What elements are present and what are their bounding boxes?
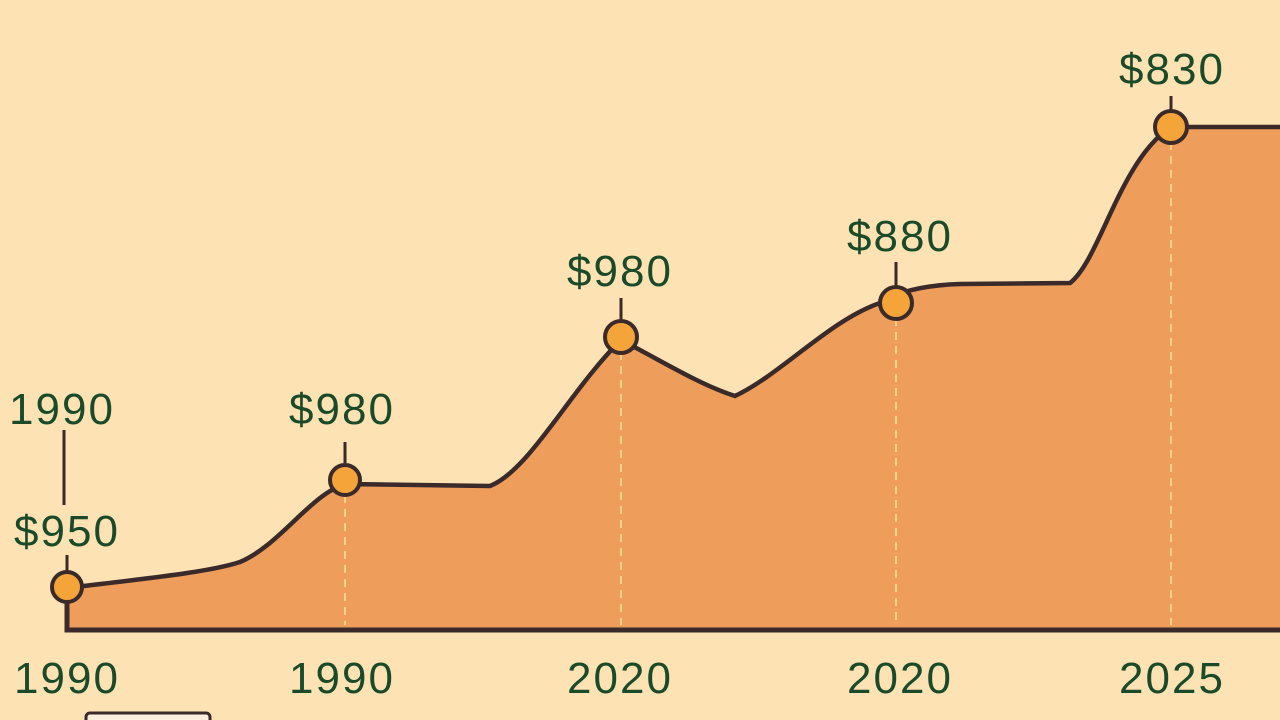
value labels: 1990 xyxy=(9,385,115,434)
partial box bottom xyxy=(86,713,210,720)
x-axis labels: 2020 xyxy=(567,654,673,703)
area chart xyxy=(52,96,1280,630)
value labels: $950 xyxy=(14,507,120,556)
x-axis labels xyxy=(14,654,1225,703)
value labels: $830 xyxy=(1119,45,1225,94)
x-axis labels: 2020 xyxy=(847,654,953,703)
x-axis labels: 2025 xyxy=(1119,654,1225,703)
x-axis labels: 1990 xyxy=(289,654,395,703)
value labels xyxy=(9,45,1225,556)
value labels: $980 xyxy=(289,385,395,434)
value labels: $880 xyxy=(847,212,953,261)
x-axis labels: 1990 xyxy=(14,654,120,703)
value labels: $980 xyxy=(567,247,673,296)
